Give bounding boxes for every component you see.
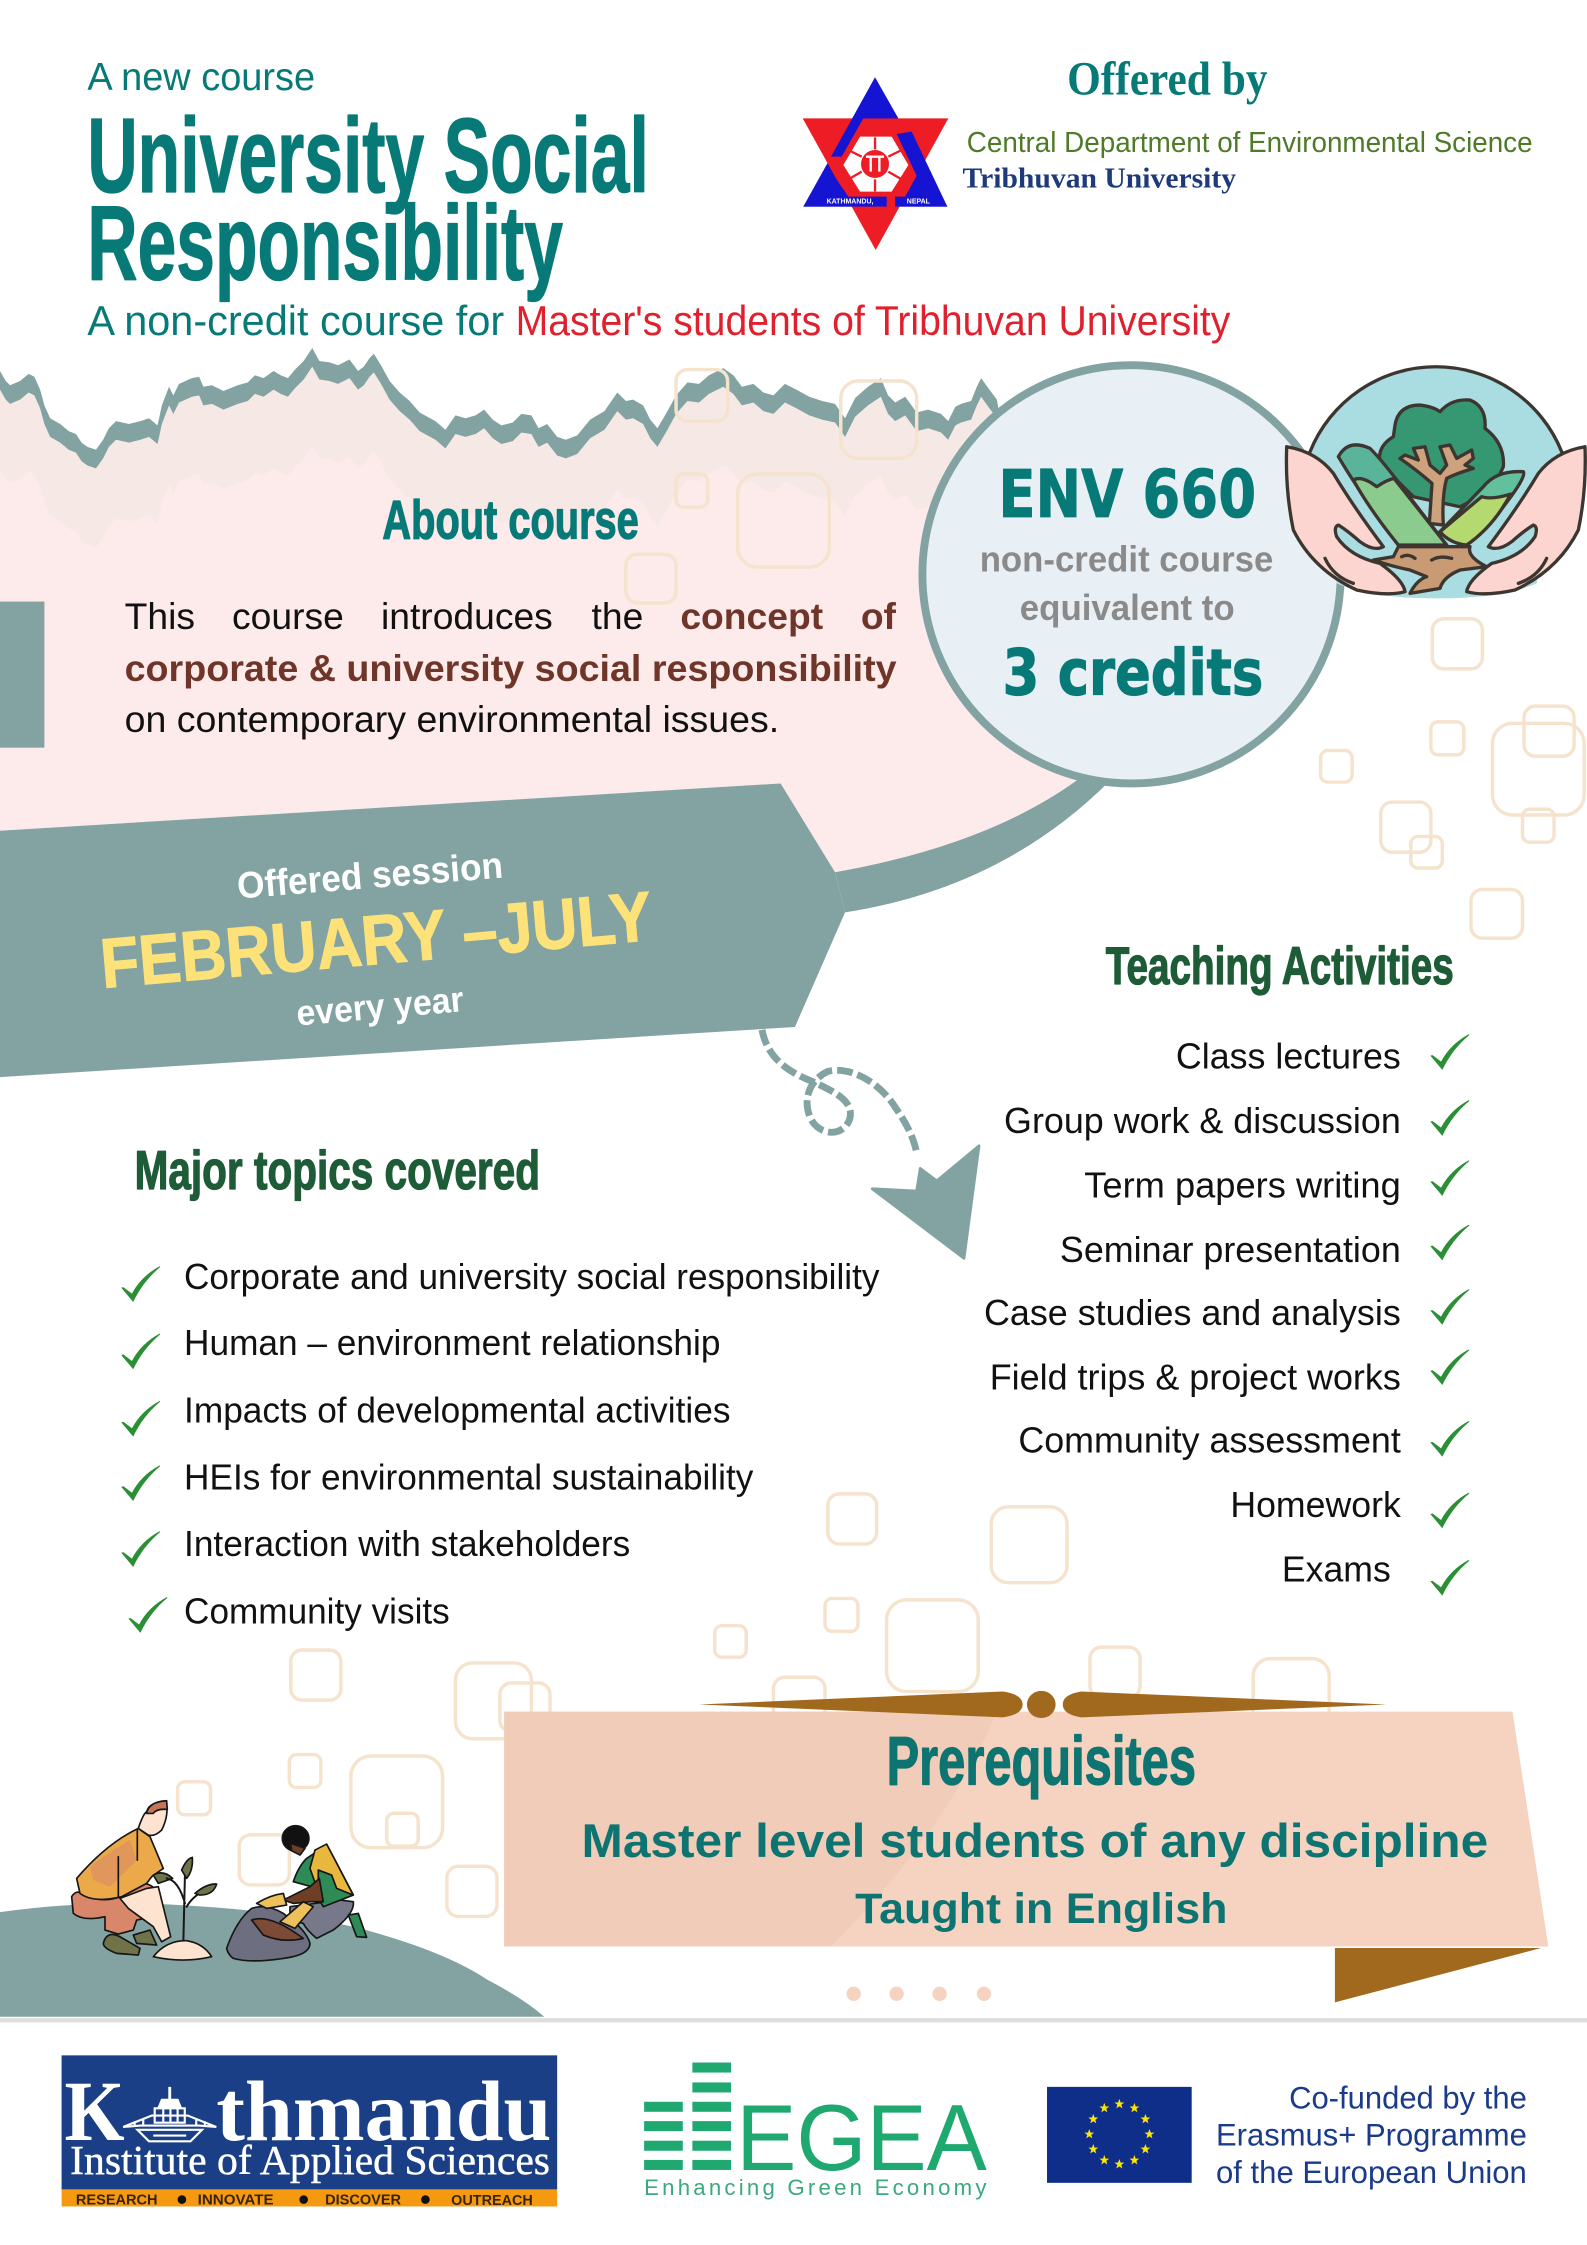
pagination dots: [846, 1987, 991, 2001]
major topics list: HEIs for environmental sustainability: [184, 1458, 753, 1498]
teaching activities heading: Teaching Activities: [1106, 937, 1454, 996]
title line 1: University Social: [87, 97, 649, 215]
offered by block: [803, 54, 1533, 250]
session months: FEBRUARY –JULY: [97, 876, 655, 1003]
teaching activities list: Class lectures: [1176, 1036, 1401, 1077]
department name: Central Department of Environmental Science: [967, 127, 1533, 159]
course code circle: [922, 365, 1341, 783]
left accent bar: [0, 602, 44, 748]
about course heading: About course: [382, 490, 639, 551]
bottom left hill: [0, 1903, 544, 2017]
icon: temple: [123, 2087, 216, 2141]
logo: Kathmandu Institute of Applied Sciences: [62, 2055, 557, 2209]
co-funding statement: Co-funded by the: [1289, 2079, 1527, 2115]
university name: Tribhuvan University: [963, 163, 1237, 195]
icon: Tribhuvan University emblem: NEPAL: [907, 199, 931, 206]
teaching activities list: Community assessment: [1018, 1419, 1401, 1460]
icon: Tribhuvan University emblem: KATHMANDU,: [827, 199, 873, 206]
session label: Offered session: [236, 844, 504, 906]
teaching activities list: Seminar presentation: [1060, 1229, 1401, 1270]
teaching activities list: Field trips & project works: [990, 1356, 1401, 1397]
man planting: [72, 1801, 173, 1955]
arrow: dashed looping arrow: [762, 1030, 979, 1258]
subtitle teal part: A non-credit course for: [87, 297, 504, 344]
course code: ENV 660: [998, 456, 1256, 533]
prerequisites heading: Prerequisites: [887, 1723, 1196, 1800]
seedling: [153, 1857, 217, 1960]
about course paragraph: on contemporary environmental issues.: [125, 698, 779, 740]
course code circle: equivalent to: [1020, 588, 1235, 628]
logo: Kathmandu Institute of Applied Sciences: DISCOVER: [325, 2191, 401, 2208]
icon: Tribhuvan University emblem: [803, 77, 948, 250]
credit description: non-credit course: [980, 539, 1273, 579]
logo: Kathmandu Institute of Applied Sciences: thmandu: [216, 2063, 551, 2159]
logo: Kathmandu Institute of Applied Sciences: Institute of Applied Sciences: [70, 2137, 550, 2183]
teaching activities list: Exams: [1282, 1548, 1391, 1589]
about course paragraph: introduces: [381, 595, 553, 637]
offered by heading: Offered by: [1067, 54, 1268, 106]
logo wordmark: EGEA: [736, 2085, 987, 2190]
teaching activities list: Group work & discussion: [1004, 1100, 1401, 1141]
about course paragraph: of: [861, 595, 897, 637]
major topics list: Interaction with stakeholders: [184, 1524, 630, 1564]
co-funding statement: [1216, 2079, 1527, 2190]
logo: EU flag: [1047, 2087, 1192, 2183]
teaching activities list: Case studies and analysis: [984, 1292, 1401, 1333]
teaching activities check marks: [1430, 1034, 1469, 1596]
major topics list: Impacts of developmental activities: [184, 1390, 730, 1430]
co-funding statement: Erasmus+ Programme: [1216, 2117, 1527, 2153]
panel: prerequisites: [504, 1691, 1548, 2002]
requirement: Master level students of any discipline: [582, 1815, 1488, 1868]
teaching activities list: Term papers writing: [1084, 1164, 1401, 1205]
about course paragraph: [125, 595, 897, 740]
subtitle red part: Master's students of Tribhuvan University: [516, 297, 1231, 344]
session frequency: every year: [295, 979, 465, 1034]
teaching activities list: [984, 1036, 1402, 1589]
logo: Kathmandu Institute of Applied Sciences: RESEARCH: [76, 2191, 158, 2208]
teaching activities list: Homework: [1230, 1484, 1402, 1525]
logo: Kathmandu Institute of Applied Sciences: INNOVATE: [198, 2191, 274, 2208]
about course paragraph: This: [125, 595, 195, 637]
about course paragraph: course: [232, 595, 344, 637]
major topics heading: Major topics covered: [135, 1140, 540, 1201]
about course paragraph: concept: [680, 595, 823, 637]
icon: hands holding tree: [1286, 367, 1585, 598]
curved connector band: [835, 779, 1110, 912]
kicker: a new course: A new course: [87, 56, 315, 99]
panel ornament: [699, 1691, 1386, 1718]
language: Taught in English: [855, 1885, 1227, 1933]
credit value: 3 credits: [1003, 637, 1263, 710]
footer divider: [0, 2018, 1587, 2022]
major topics list: Community visits: [184, 1592, 450, 1632]
logo: Kathmandu Institute of Applied Sciences: K: [64, 2063, 125, 2159]
title line 2: Responsibility: [87, 184, 563, 302]
illustration: volunteers planting and collecting waste: [72, 1801, 367, 1961]
major topics list: Corporate and university social responsibility: [184, 1257, 880, 1297]
about course paragraph: the: [592, 595, 643, 637]
about course paragraph: corporate & university social responsibility: [125, 647, 897, 689]
icon: equalizer bars: [644, 2063, 731, 2170]
major topics list: Human – environment relationship: [184, 1323, 720, 1363]
decorative rounded squares: [178, 370, 1584, 1916]
person collecting waste: [227, 1826, 367, 1961]
pink wave background with jagged ridge: [0, 348, 1132, 917]
header: course title block: [87, 56, 1231, 344]
logo: EGEA: [644, 2063, 987, 2200]
logo: Kathmandu Institute of Applied Sciences: OUTREACH: [451, 2192, 533, 2209]
logo tagline: Enhancing Green Economy: [644, 2175, 987, 2200]
ribbon: offered session: [0, 783, 845, 1077]
co-funding statement: of the European Union: [1216, 2154, 1527, 2190]
panel fold: [1335, 1948, 1541, 2002]
major topics list: [184, 1257, 880, 1632]
major topics check marks: [121, 1266, 167, 1633]
